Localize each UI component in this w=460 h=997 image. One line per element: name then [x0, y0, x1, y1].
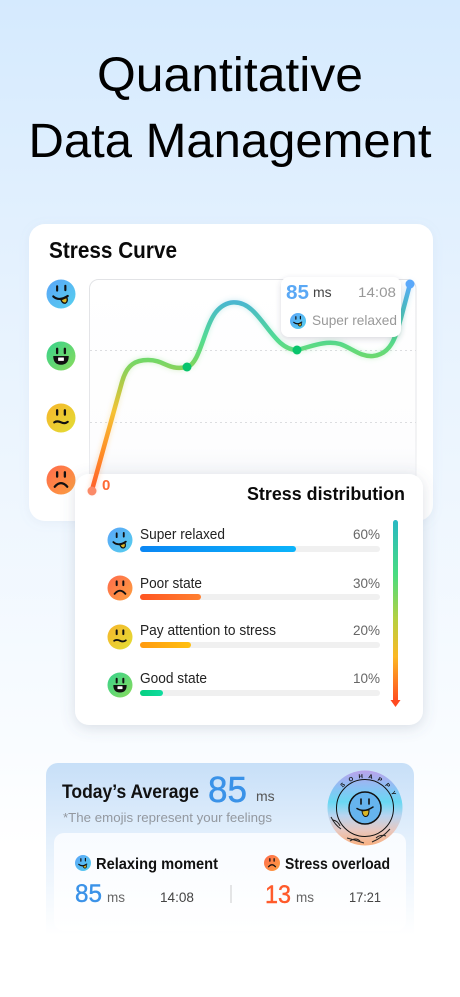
- tooltip: [281, 277, 401, 337]
- tooltip unit: ms: [313, 284, 332, 300]
- row: pay attention to stress 20%: [108, 623, 380, 650]
- title: [28, 49, 432, 168]
- icon: good state face: [46, 342, 76, 370]
- stress overload label: Stress overload: [285, 856, 390, 873]
- tooltip time: 14:08: [358, 284, 396, 300]
- start point: [88, 486, 96, 496]
- title: Quantitative: [97, 49, 363, 102]
- badge: sohappy holographic sticker: [328, 770, 402, 846]
- arrow: stress gradient scale: [390, 520, 400, 707]
- panel: stress distribution: [75, 474, 423, 725]
- note: *The emojis represent your feelings: [63, 810, 273, 825]
- row: super relaxed 60%: 60%: [353, 527, 380, 542]
- data point: [292, 346, 302, 354]
- heading: stress curve: Stress Curve: [49, 237, 177, 263]
- relaxing moment label: Relaxing moment: [96, 856, 219, 873]
- line chart: stress curve: [88, 280, 414, 496]
- inner summary card: [54, 833, 406, 931]
- label: zero: 0: [102, 477, 110, 494]
- row: poor state 30%: 30%: [353, 576, 380, 591]
- badge: sohappy holographic sticker: SOHAPPY: [340, 774, 396, 794]
- row: good state 10%: 10%: [353, 671, 380, 686]
- chart frame: [90, 280, 416, 504]
- divider: [230, 885, 232, 903]
- tooltip value: 85: [286, 282, 309, 304]
- icon: overload face: [264, 855, 280, 871]
- row: poor state 30%: [108, 576, 380, 600]
- relaxing value: 85: [75, 880, 102, 908]
- row: pay attention to stress 20%: 20%: [353, 623, 380, 638]
- end point: [406, 280, 414, 288]
- average value: 85: [208, 769, 247, 810]
- icon: poor state face: [46, 466, 76, 494]
- panel: today's average: [46, 763, 414, 909]
- panel: stress curve: [29, 224, 433, 521]
- tooltip label: Super relaxed: [312, 312, 397, 328]
- row: super relaxed 60%: [108, 527, 380, 552]
- relaxing time: 14:08: [160, 890, 194, 905]
- icon: relaxing face: [75, 855, 91, 871]
- relaxing unit: ms: [107, 890, 125, 905]
- overload time: 17:21: [349, 890, 381, 905]
- row: pay attention to stress 20%: Pay attention to stress: [140, 623, 276, 639]
- average unit: ms: [256, 788, 275, 804]
- heading: stress distribution: Stress distribution: [247, 483, 405, 504]
- row: good state 10%: [108, 671, 380, 698]
- data point: [182, 362, 192, 372]
- row: poor state 30%: Poor state: [140, 576, 202, 592]
- title: Data Management: [28, 115, 432, 168]
- overload unit: ms: [296, 890, 314, 905]
- heading: today's average: Today’s Average: [62, 782, 199, 803]
- row: good state 10%: Good state: [140, 671, 207, 687]
- icon: tooltip face: [290, 313, 306, 329]
- overload value: 13: [265, 881, 291, 909]
- icon: super relaxed face: [46, 280, 76, 308]
- row: super relaxed 60%: Super relaxed: [140, 527, 225, 543]
- icon: attention face: [46, 404, 76, 432]
